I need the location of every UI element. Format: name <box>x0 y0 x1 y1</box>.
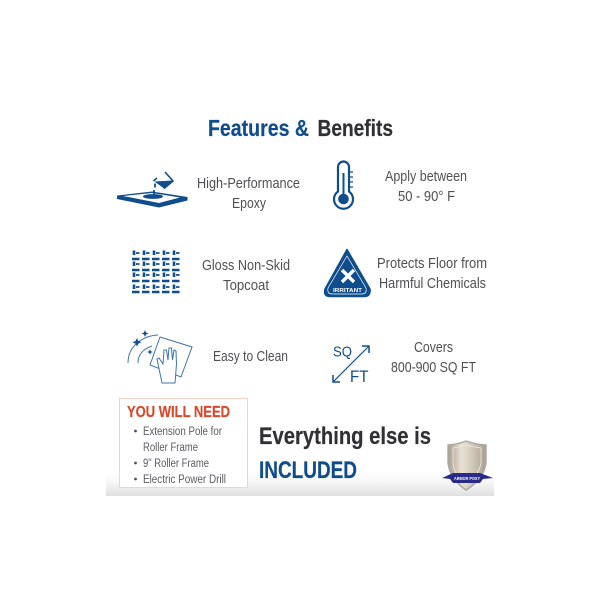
list: Roller Frame <box>143 442 198 454</box>
icon: hand wiping with cloth <box>128 330 192 383</box>
feature: protects floor <box>325 250 487 296</box>
statement: everything else is included: INCLUDED <box>259 457 357 484</box>
label: Easy to Clean <box>213 348 288 365</box>
icon: woven texture <box>132 250 181 292</box>
feature: high-performance epoxy <box>117 172 300 212</box>
icon: irritant triangle <box>325 250 370 296</box>
label <box>391 339 476 376</box>
label: Topcoat <box>223 277 270 294</box>
label <box>377 255 487 292</box>
heading: YOU WILL NEED <box>127 404 230 421</box>
list <box>134 426 226 486</box>
label: Covers <box>414 339 453 356</box>
label: High-Performance <box>197 175 300 192</box>
list: Electric Power Drill <box>143 474 226 486</box>
label: 50 - 90° F <box>398 188 455 205</box>
list: 9" Roller Frame <box>143 458 209 470</box>
label <box>197 175 300 212</box>
statement: everything else is included <box>259 423 431 484</box>
icon: square foot arrow: FT <box>350 368 368 386</box>
bottom grey gradient band <box>106 472 494 496</box>
title: Benefits <box>318 115 393 141</box>
icon: thermometer <box>334 162 353 209</box>
icon: armor poxy shield: ARMOR POXY <box>454 476 480 481</box>
label: Epoxy <box>232 195 266 212</box>
icon: square foot arrow <box>333 344 369 386</box>
label: 800-900 SQ FT <box>391 359 476 376</box>
label <box>385 168 467 205</box>
feature: easy to clean <box>128 330 288 383</box>
icon: armor poxy shield <box>442 441 493 490</box>
icon: epoxy pouring on floor <box>117 172 188 208</box>
feature: coverage <box>333 339 476 386</box>
title <box>208 115 393 141</box>
panel: you will need <box>120 398 248 488</box>
feature: gloss non-skid topcoat <box>132 250 290 294</box>
label: Protects Floor from <box>377 255 487 272</box>
label: Apply between <box>385 168 467 185</box>
title: Features & <box>208 115 309 141</box>
icon: square foot arrow: SQ <box>333 344 352 360</box>
list: Extension Pole for <box>143 426 222 438</box>
feature: application temperature <box>334 162 467 209</box>
label: Harmful Chemicals <box>379 275 486 292</box>
label <box>202 257 290 294</box>
icon: irritant triangle: IRRITANT <box>333 288 362 294</box>
label: Gloss Non-Skid <box>202 257 290 274</box>
statement: everything else is included: Everything else is <box>259 423 431 450</box>
